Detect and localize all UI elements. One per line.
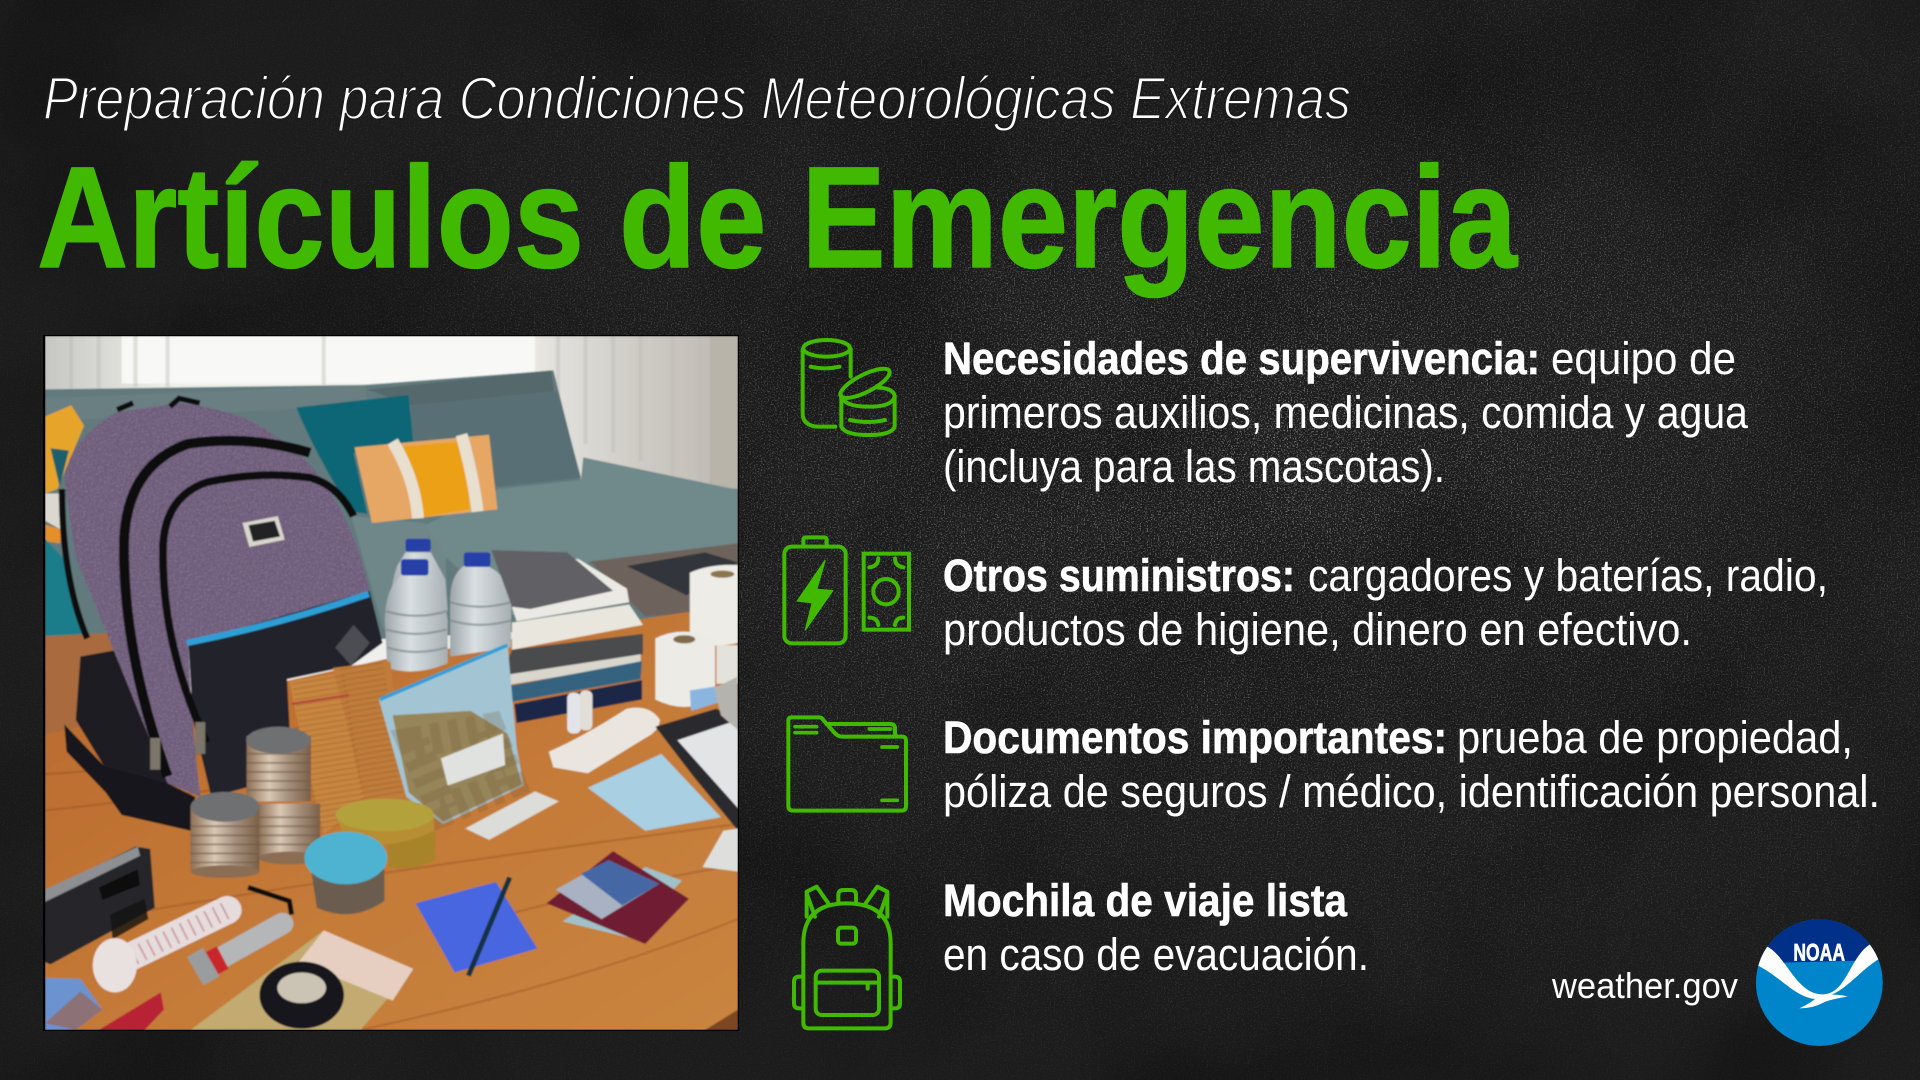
icon: document folder <box>788 717 906 811</box>
text: other supplies: Otros suministros: <box>943 550 1295 601</box>
text: survival necessities: Necesidades de supervivencia: <box>943 333 1540 384</box>
text: go bag: Mochila de viaje lista <box>943 875 1348 926</box>
text: other supplies <box>943 550 1828 655</box>
title: Artículos de Emergencia <box>37 137 1518 298</box>
text: go bag: en caso de evacuación. <box>943 929 1369 980</box>
icon: canned food <box>803 340 895 435</box>
text: survival necessities: equipo de <box>1551 333 1736 384</box>
text: important documents <box>943 712 1880 817</box>
text: important documents: prueba de propiedad, <box>1457 712 1853 763</box>
icon: backpack <box>794 887 900 1028</box>
photo: emergency supplies on table <box>43 335 739 1031</box>
text: other supplies: cargadores y baterías, radio, <box>1308 550 1828 601</box>
logo: NOAA <box>1753 917 1887 1046</box>
text: survival necessities: (incluya para las mascotas). <box>943 441 1445 492</box>
text: survival necessities: primeros auxilios, medicinas, comida y agua <box>943 387 1749 438</box>
logo: NOAA: NOAA <box>1793 940 1845 967</box>
text: survival necessities <box>943 333 1749 492</box>
website label: weather.gov <box>1551 965 1738 1006</box>
icon: battery and cash <box>784 537 909 643</box>
text: go bag <box>943 875 1369 980</box>
text: other supplies: productos de higiene, dinero en efectivo. <box>943 604 1692 655</box>
text: important documents: Documentos importantes: <box>943 712 1447 763</box>
subtitle: Preparación para Condiciones Meteorológicas Extremas <box>43 65 1351 132</box>
